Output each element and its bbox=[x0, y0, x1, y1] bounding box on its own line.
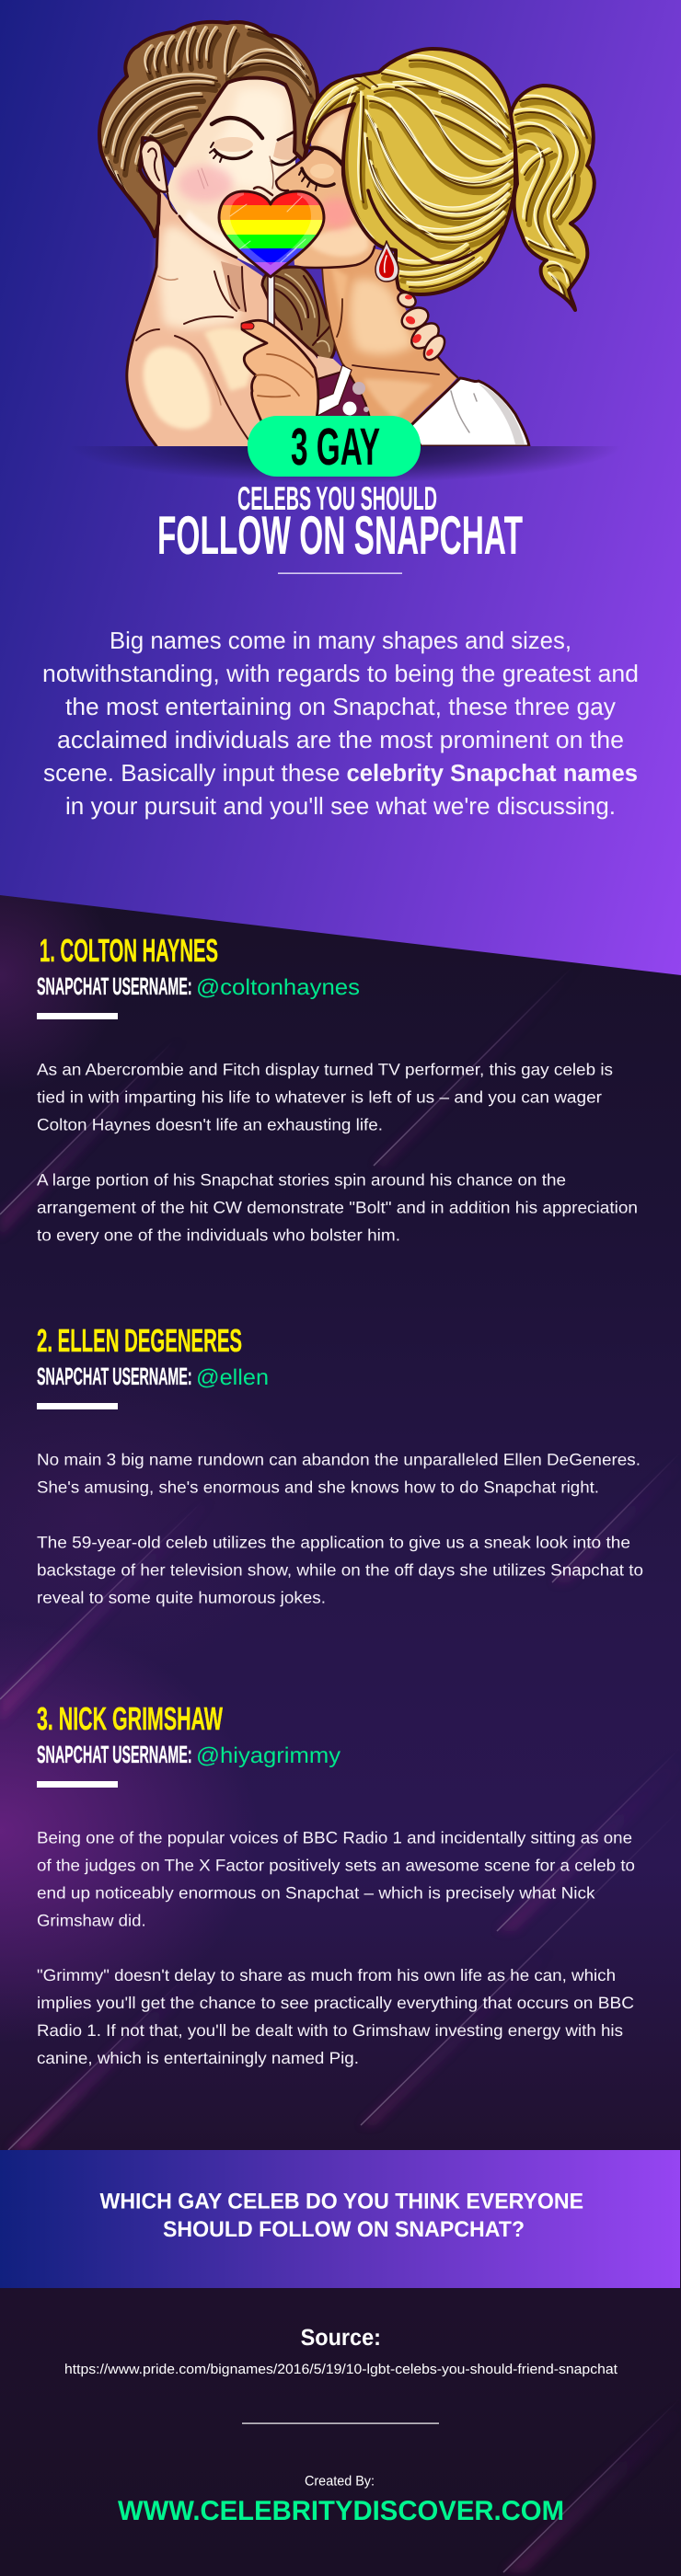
body text: to every one of the individuals who bolster him. bbox=[37, 1225, 400, 1244]
title: celebs you should follow on snapchat: CELEBS YOU SHOULD bbox=[237, 479, 437, 517]
question banner: WHICH GAY CELEB DO YOU THINK EVERYONE bbox=[99, 2190, 583, 2214]
body text: Being one of the popular voices of BBC Radio 1 and incidentally sitting as one bbox=[37, 1829, 632, 1847]
body text: backstage of her television show, while on the off days she utilizes Snapchat to bbox=[37, 1560, 643, 1579]
question banner bbox=[0, 2150, 680, 2288]
accent bar bbox=[37, 1013, 118, 1019]
title: celebs you should follow on snapchat bbox=[157, 479, 523, 566]
credit: Created By: bbox=[305, 2473, 375, 2490]
brunette woman hair bbox=[99, 22, 317, 236]
body text: of the judges on The X Factor positively sets an awesome scene for a celeb to bbox=[37, 1857, 635, 1875]
intro paragraph: in your pursuit and you'll see what we're discussing. bbox=[65, 792, 616, 820]
accent bar bbox=[37, 1781, 118, 1788]
body text: A large portion of his Snapchat stories spin around his chance on the bbox=[37, 1170, 566, 1189]
username: SNAPCHAT USERNAME: bbox=[37, 972, 192, 1000]
body text: Colton Haynes doesn't life an exhausting life. bbox=[37, 1115, 383, 1133]
brunette woman face bbox=[166, 78, 298, 276]
section 3: Nick Grimshaw bbox=[37, 1701, 635, 2067]
intro paragraph: notwithstanding, with regards to being the greatest and bbox=[42, 660, 639, 687]
body text: reveal to some quite humorous jokes. bbox=[37, 1588, 326, 1606]
title pill: 3 GAY: 3 GAY bbox=[291, 418, 380, 477]
intro paragraph: the most entertaining on Snapchat, these three gay bbox=[65, 693, 616, 720]
blonde woman neck and chest bbox=[321, 248, 458, 423]
blonde main hair bbox=[304, 49, 517, 294]
intro paragraph: Big names come in many shapes and sizes, bbox=[110, 627, 571, 654]
body text: "Grimmy" doesn't delay to share as much from his own life as he can, which bbox=[37, 1966, 616, 1984]
lollipop stick bbox=[267, 275, 275, 326]
username: SNAPCHAT USERNAME: bbox=[37, 1741, 192, 1768]
section 2: Ellen DeGeneres bbox=[37, 1323, 643, 1606]
body text: tied in with imparting his life to whatever is left of us – and you can wager bbox=[37, 1087, 602, 1106]
source: https://www.pride.com/bignames/2016/5/19/10-lgbt-celebs-you-should-friend-snapchat bbox=[64, 2362, 618, 2377]
rainbow heart lollipop bbox=[217, 190, 326, 278]
section 1: Colton Haynes bbox=[37, 933, 638, 1244]
dark lower background with diagonal streaks bbox=[0, 856, 681, 2576]
white shirt bbox=[411, 378, 529, 446]
body text: She's amusing, she's enormous and she knows how to do Snapchat right. bbox=[37, 1478, 599, 1496]
credit bbox=[118, 2473, 564, 2526]
body text bbox=[37, 1450, 643, 1606]
skin patch near collar bbox=[317, 356, 341, 378]
body text bbox=[37, 1060, 638, 1244]
braid bbox=[262, 267, 335, 373]
intro paragraph bbox=[42, 627, 639, 820]
heading: 3. NICK GRIMSHAW bbox=[37, 1701, 223, 1737]
intro paragraph: celebrity Snapchat names bbox=[346, 759, 638, 787]
body text: Radio 1. If not that, you'll be dealt with to Grimshaw investing energy with his bbox=[37, 2021, 623, 2040]
intro paragraph: acclaimed individuals are the most prominent on the bbox=[57, 726, 624, 753]
body text: implies you'll get the chance to see practically everything that occurs on BBC bbox=[37, 1994, 634, 2012]
blonde woman face bbox=[276, 104, 375, 268]
brunette woman ear bbox=[141, 140, 167, 192]
title divider bbox=[278, 572, 402, 574]
username: @ellen bbox=[196, 1365, 269, 1390]
brunette woman body bbox=[127, 189, 317, 446]
username: @coltonhaynes bbox=[196, 975, 360, 1000]
intro paragraph: scene. Basically input these bbox=[43, 759, 340, 787]
hand holding lollipop bbox=[241, 320, 318, 423]
username: @hiyagrimmy bbox=[196, 1743, 340, 1768]
body text: arrangement of the hit CW demonstrate "Bolt" and in addition his appreciation bbox=[37, 1198, 638, 1216]
username: SNAPCHAT USERNAME: bbox=[37, 1363, 192, 1390]
earring bbox=[375, 241, 398, 282]
top gradient panel with slanted lower edge bbox=[0, 0, 681, 975]
accent bar bbox=[37, 1403, 118, 1409]
credit: WWW.CELEBRITYDISCOVER.COM bbox=[118, 2496, 564, 2526]
source: Source: bbox=[301, 2325, 381, 2351]
heading: 1. COLTON HAYNES bbox=[40, 933, 218, 969]
heading: 2. ELLEN DEGENERES bbox=[37, 1323, 242, 1359]
footer divider bbox=[242, 2423, 439, 2424]
title pill: 3 GAY bbox=[248, 416, 421, 477]
shadow under illustration bbox=[88, 446, 609, 481]
body text: Grimshaw did. bbox=[37, 1912, 146, 1930]
body text bbox=[37, 1829, 635, 2067]
polka dot dress and collar bbox=[318, 364, 370, 416]
body text: As an Abercrombie and Fitch display turned TV performer, this gay celeb is bbox=[37, 1060, 613, 1078]
illustration: two women kissing behind a rainbow lollipop bbox=[99, 22, 594, 446]
body text: canine, which is entertainingly named Pig. bbox=[37, 2049, 359, 2067]
source bbox=[64, 2325, 618, 2377]
body text: end up noticeably enormous on Snapchat – which is precisely what Nick bbox=[37, 1884, 596, 1903]
question banner: SHOULD FOLLOW ON SNAPCHAT? bbox=[163, 2217, 525, 2242]
blonde ponytail bbox=[511, 86, 594, 310]
body text: No main 3 big name rundown can abandon the unparalleled Ellen DeGeneres. bbox=[37, 1450, 641, 1468]
body text: The 59-year-old celeb utilizes the application to give us a sneak look into the bbox=[37, 1533, 630, 1551]
hand on neck with red nails bbox=[397, 293, 445, 361]
